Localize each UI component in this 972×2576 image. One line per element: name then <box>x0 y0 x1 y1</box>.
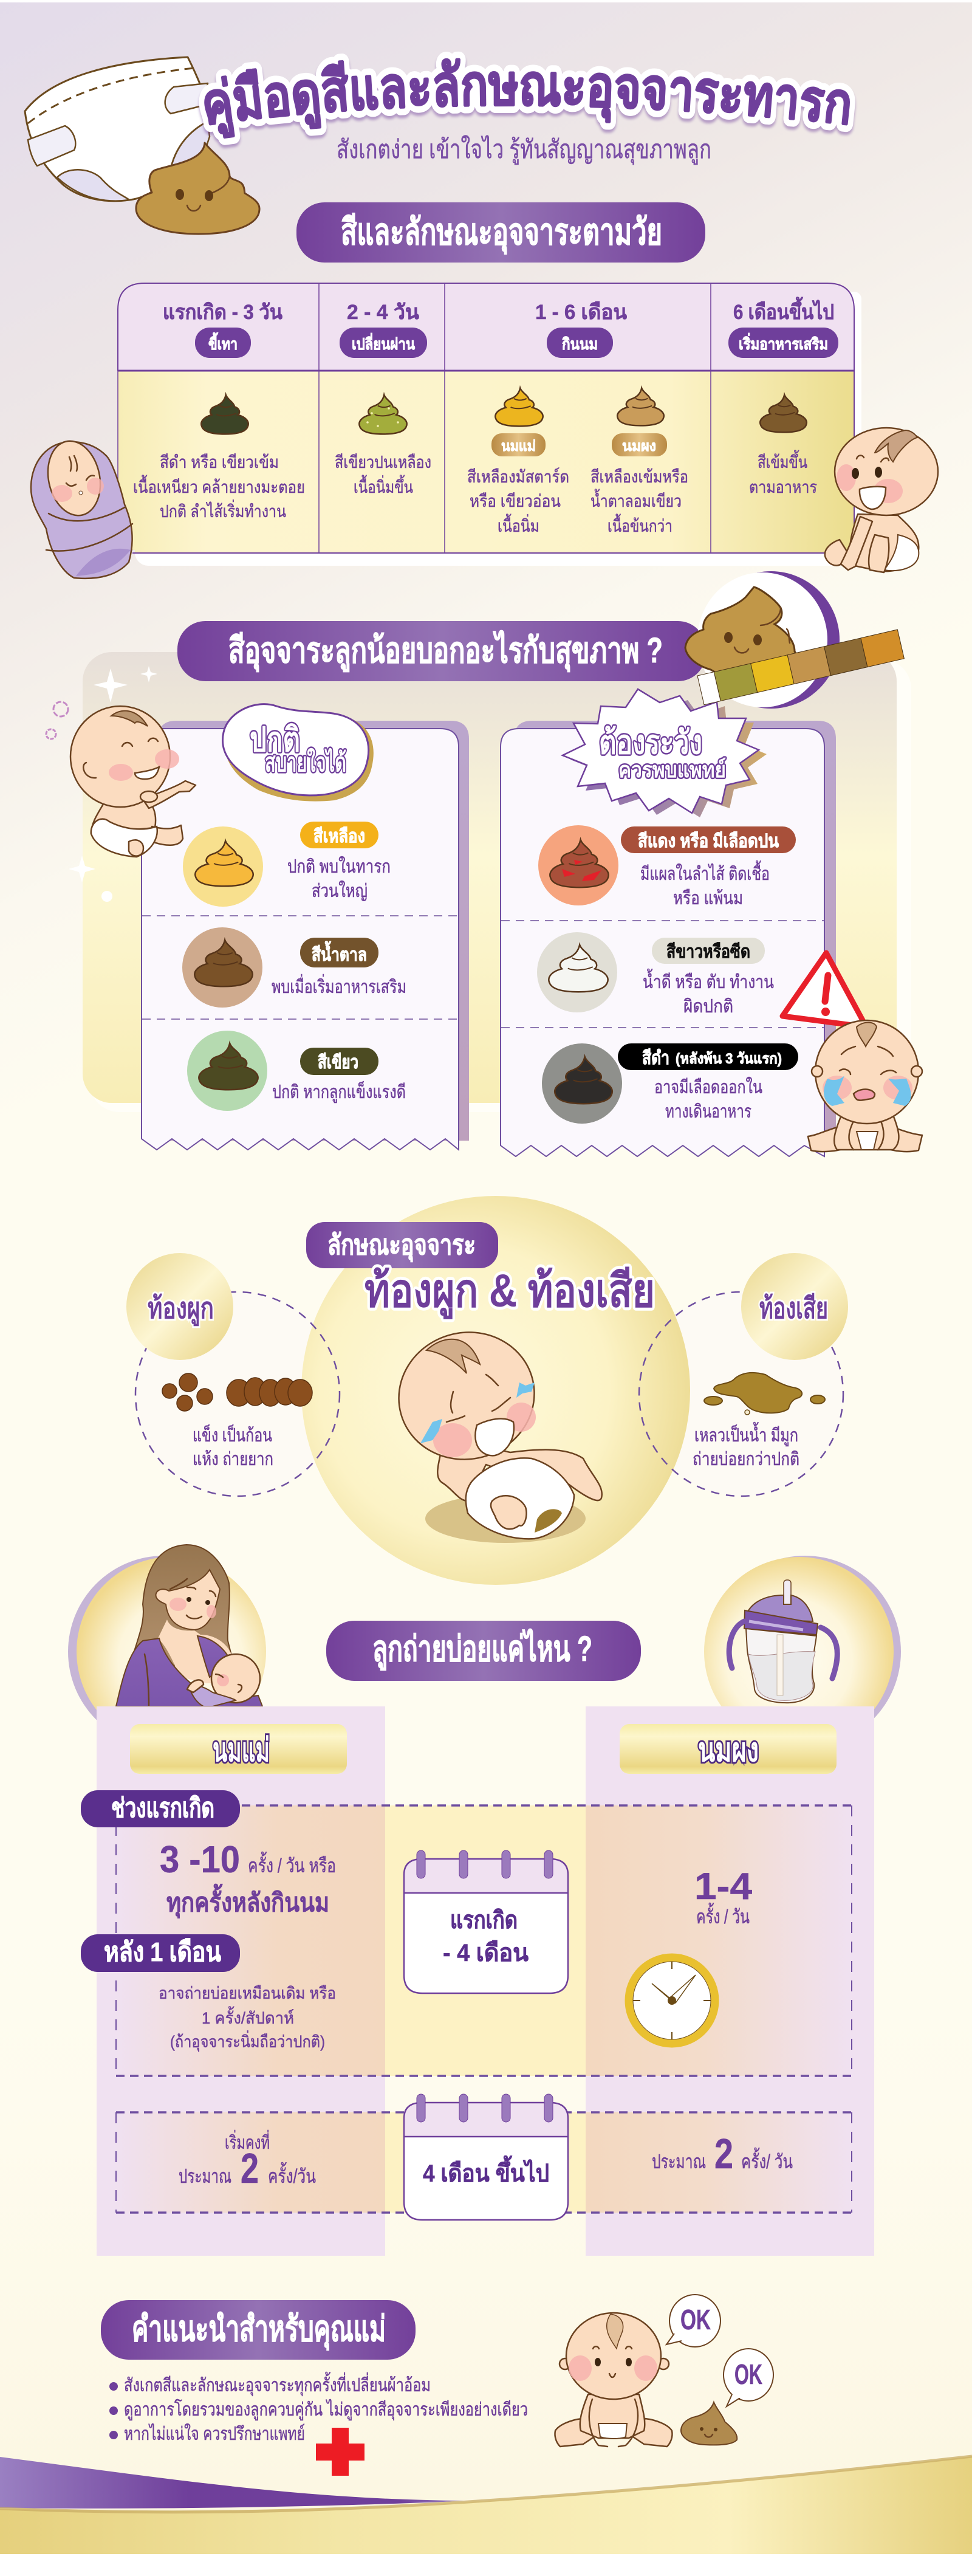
panel: age table <box>118 283 861 566</box>
heading: how often: ลูกถ่ายบ่อยแค่ไหน ? <box>372 1629 592 1671</box>
column: 6 months up: เริ่มอาหารเสริม <box>739 332 828 353</box>
group: constipation <box>126 1253 312 1469</box>
item: white <box>537 932 774 1017</box>
group: constipation: ท้องผูก <box>148 1293 214 1327</box>
item: white: สีขาวหรือซีด <box>666 942 750 962</box>
advice list: สังเกตสีและลักษณะอุจจาระทุกครั้งที่เปลี่ยนผ้าอ้อม <box>124 2372 431 2397</box>
advice list <box>109 2372 528 2444</box>
item: yellow <box>183 822 391 907</box>
icon: calendar four months up <box>404 2094 568 2220</box>
tag: formula: นมผง <box>698 1732 759 1768</box>
item: yellow: สีเหลือง <box>313 826 365 847</box>
column: birth to 3 days: ขี้เทา <box>208 332 238 353</box>
text: after one month note: อาจถ่ายบ่อยเหมือนเดิม หรือ <box>159 1984 336 2002</box>
column: 2-4 days: เปลี่ยนผ่าน <box>352 332 415 353</box>
heading: advice <box>101 2300 416 2360</box>
icon: red cross <box>316 2428 364 2476</box>
column: 6 months up: สีเข้มขึ้น <box>758 450 807 472</box>
tag: formula <box>620 1724 837 1774</box>
panel: advice <box>101 2295 773 2476</box>
text: after one month note: (ถ้าอุจจาระนิ่มถือว่าปกติ) <box>170 2030 325 2052</box>
item: brown <box>182 927 406 1008</box>
panel: what the colors say <box>46 571 922 1156</box>
subtitle: สังเกตง่าย เข้าใจไว รู้ทันสัญญาณสุขภาพลูก <box>337 135 711 165</box>
column: 1-6 months: สีเหลืองมัสตาร์ด <box>467 467 569 486</box>
icon: smiling poo mascot <box>136 143 259 234</box>
text: breast milk newborn frequency: 3 -10 <box>160 1839 240 1881</box>
big circle <box>301 1196 690 1585</box>
icon: sparkles and flowers <box>46 666 157 902</box>
group: diarrhea: ท้องเสีย <box>759 1293 828 1325</box>
item: black: อาจมีเลือดออกใน <box>654 1077 762 1097</box>
column: 6 months up <box>728 297 838 496</box>
icon: warning triangle <box>782 953 866 1027</box>
text: after one month note: 1 ครั้ง/สัปดาห์ <box>202 2006 294 2027</box>
column: 2-4 days: สีเขียวปนเหลือง <box>335 453 431 472</box>
item: black: สีดำ <box>642 1048 669 1068</box>
column: 6 months up: ตามอาหาร <box>749 478 817 496</box>
callout: caution burst: ต้องระวัง <box>599 724 702 761</box>
icon: calendar four months up: 4 เดือน ขึ้นไป <box>423 2155 549 2187</box>
column: birth to 3 days <box>133 301 305 521</box>
item: black: (หลังพ้น 3 วันแรก) <box>676 1051 782 1067</box>
text: breast milk after four months: 2 <box>241 2145 259 2192</box>
callout: poo ok bubble: OK <box>734 2358 762 2390</box>
tag: after one month <box>81 1934 240 1972</box>
heading tag <box>306 1222 498 1268</box>
column: birth to 3 days: เนื้อเหนียว คล้ายยางมะตอย <box>133 475 305 496</box>
text: breast milk after four months: เริ่มคงที่ <box>225 2130 270 2153</box>
column: birth to 3 days: ปกติ ลำไส้เริ่มทำงาน <box>160 500 286 521</box>
heading: constipation and diarrhea: ท้องผูก & ท้องเสีย <box>364 1265 655 1319</box>
text: after one month note <box>159 1984 336 2052</box>
column: 1-6 months: สีเหลืองเข้มหรือ <box>590 467 688 486</box>
footer wave <box>0 2456 972 2554</box>
group: constipation: แข็ง เป็นก้อน <box>193 1424 272 1446</box>
text: formula frequency: ครั้ง / วัน <box>696 1903 750 1928</box>
text: breast milk newborn frequency: ครั้ง / วัน หรือ <box>248 1852 336 1877</box>
callout: poo ok bubble <box>724 2349 773 2406</box>
text: formula frequency <box>694 1866 753 1928</box>
heading: color meaning <box>177 621 706 681</box>
column: 2-4 days: 2 - 4 วัน <box>347 301 419 324</box>
icon: poo with color strip <box>685 571 904 709</box>
column: 6 months up: 6 เดือนขึ้นไป <box>733 297 834 324</box>
color strip <box>697 630 904 705</box>
icon: crying baby <box>808 1020 922 1152</box>
item: white: น้ำดี หรือ ตับ ทำงาน <box>643 969 774 992</box>
icon: ok baby <box>555 2313 673 2447</box>
tag: breast milk <box>130 1724 347 1774</box>
item: black: ทางเดินอาหาร <box>665 1102 751 1122</box>
group: constipation: แห้ง ถ่ายยาก <box>193 1449 273 1469</box>
column: 1-6 months: กินนม <box>562 335 598 353</box>
icon: small poo mascot <box>681 2402 737 2445</box>
text: breast milk newborn frequency <box>160 1839 336 1918</box>
item: red: สีแดง หรือ มีเลือดปน <box>638 831 779 851</box>
text: formula after four months: 2 <box>714 2130 733 2177</box>
advice list: หากไม่แน่ใจ ควรปรึกษาแพทย์ <box>124 2423 305 2444</box>
column: 1-6 months: หรือ เขียวอ่อน <box>470 492 561 510</box>
column: birth to 3 days: สีดำ หรือ เขียวเข้ม <box>160 453 279 472</box>
icon: sippy cup <box>704 1556 901 1748</box>
item: green <box>187 1031 406 1111</box>
heading: how often <box>326 1621 641 1681</box>
item: red: มีแผลในลำไส้ ติดเชื้อ <box>640 860 770 884</box>
heading: advice: คำแนะนำสำหรับคุณแม่ <box>132 2309 386 2351</box>
group: diarrhea: ถ่ายบ่อยกว่าปกติ <box>693 1449 799 1469</box>
column: 2-4 days <box>335 301 431 496</box>
table body <box>118 371 854 553</box>
title: คู่มือดูสีและลักษณะอุจจาระทารก <box>197 52 857 149</box>
icon: sitting baby <box>825 428 938 572</box>
tag: after one month: หลัง 1 เดือน <box>104 1937 221 1967</box>
tag: breast milk: นมแม่ <box>213 1732 270 1768</box>
text: formula after four months <box>652 2130 793 2177</box>
table header <box>118 283 854 371</box>
text: formula after four months: ครั้ง/ วัน <box>741 2148 793 2172</box>
item: red: หรือ แพ้นม <box>673 888 743 908</box>
column: 1-6 months <box>467 301 688 535</box>
text: breast milk after four months: ประมาณ <box>179 2165 231 2187</box>
text: breast milk newborn frequency: ทุกครั้งหลังกินนม <box>166 1883 329 1918</box>
callout: baby ok bubble <box>666 2295 720 2347</box>
item: green: ปกติ หากลูกแข็งแรงดี <box>272 1080 406 1103</box>
heading: colors by age <box>296 202 705 263</box>
column: 1-6 months: เนื้อนิ่ม <box>498 513 539 535</box>
callout: normal: ปกติ <box>250 720 300 758</box>
item: green: สีเขียว <box>318 1053 358 1073</box>
group: diarrhea: เหลวเป็นน้ำ มีมูก <box>694 1422 798 1446</box>
icon: calendar birth to four months: แรกเกิด <box>450 1907 518 1934</box>
text: formula frequency: 1-4 <box>694 1866 753 1908</box>
item: white: ผิดปกติ <box>683 997 733 1017</box>
panel: frequency comparison <box>81 1706 874 2256</box>
icon: happy baby <box>70 706 196 857</box>
callout: caution burst <box>563 689 767 817</box>
text: formula after four months: ประมาณ <box>652 2151 706 2172</box>
advice list: ดูอาการโดยรวมของลูกควบคู่กัน ไม่ดูจากสีอุจจาระเพียงอย่างเดียว <box>124 2399 528 2421</box>
icon: swaddled baby <box>31 436 132 579</box>
tag: newborn period <box>81 1790 240 1827</box>
icon: calendar birth to four months: - 4 เดือน <box>443 1940 529 1966</box>
item: black <box>542 1043 798 1124</box>
heading tag: ลักษณะอุจจาระ <box>327 1229 476 1262</box>
panel: normal card <box>142 704 469 1150</box>
item: yellow: ปกติ พบในทารก <box>287 856 391 877</box>
panel: constipation and diarrhea <box>126 1196 848 1585</box>
tag: newborn period: ช่วงแรกเกิด <box>111 1793 214 1823</box>
column: birth to 3 days: แรกเกิด - 3 วัน <box>163 301 282 324</box>
item: brown: พบเมื่อเริ่มอาหารเสริม <box>272 974 406 997</box>
column: 1-6 months: นมแม่ <box>501 438 536 455</box>
callout: normal <box>222 704 374 802</box>
icon: diaper <box>25 57 210 201</box>
column: 2-4 days: เนื้อนิ่มขึ้น <box>354 475 413 496</box>
column: 1-6 months: นมผง <box>622 438 656 455</box>
item: yellow: ส่วนใหญ่ <box>312 881 368 901</box>
icon: crying baby lying down <box>385 1317 602 1543</box>
column: 1-6 months: เนื้อข้นกว่า <box>608 513 673 535</box>
column: 1-6 months: น้ำตาลอมเขียว <box>590 489 682 510</box>
callout: normal: สบายใจได้ <box>265 747 346 777</box>
item: brown: สีน้ำตาล <box>312 941 367 965</box>
icon: calendar birth to four months <box>404 1850 568 1993</box>
icon: mother breastfeeding <box>68 1545 266 1748</box>
callout: caution burst: ควรพบแพทย์ <box>618 757 726 782</box>
column: 1-6 months: 1 - 6 เดือน <box>535 301 627 324</box>
callout: baby ok bubble: OK <box>680 2304 711 2335</box>
item: red <box>538 825 796 908</box>
heading: colors by age: สีและลักษณะอุจจาระตามวัย <box>341 211 662 255</box>
title: คู่มือดูสีและลักษณะอุจจาระทารก <box>204 58 850 139</box>
heading: color meaning: สีอุจจาระลูกน้อยบอกอะไรกับสุขภาพ ? <box>228 630 663 673</box>
group: diarrhea <box>693 1253 848 1469</box>
text: breast milk after four months: ครั้ง/วัน <box>268 2162 316 2187</box>
text: breast milk after four months <box>179 2130 316 2192</box>
panel: warning card <box>501 689 836 1156</box>
icon: clock <box>629 1957 715 2044</box>
